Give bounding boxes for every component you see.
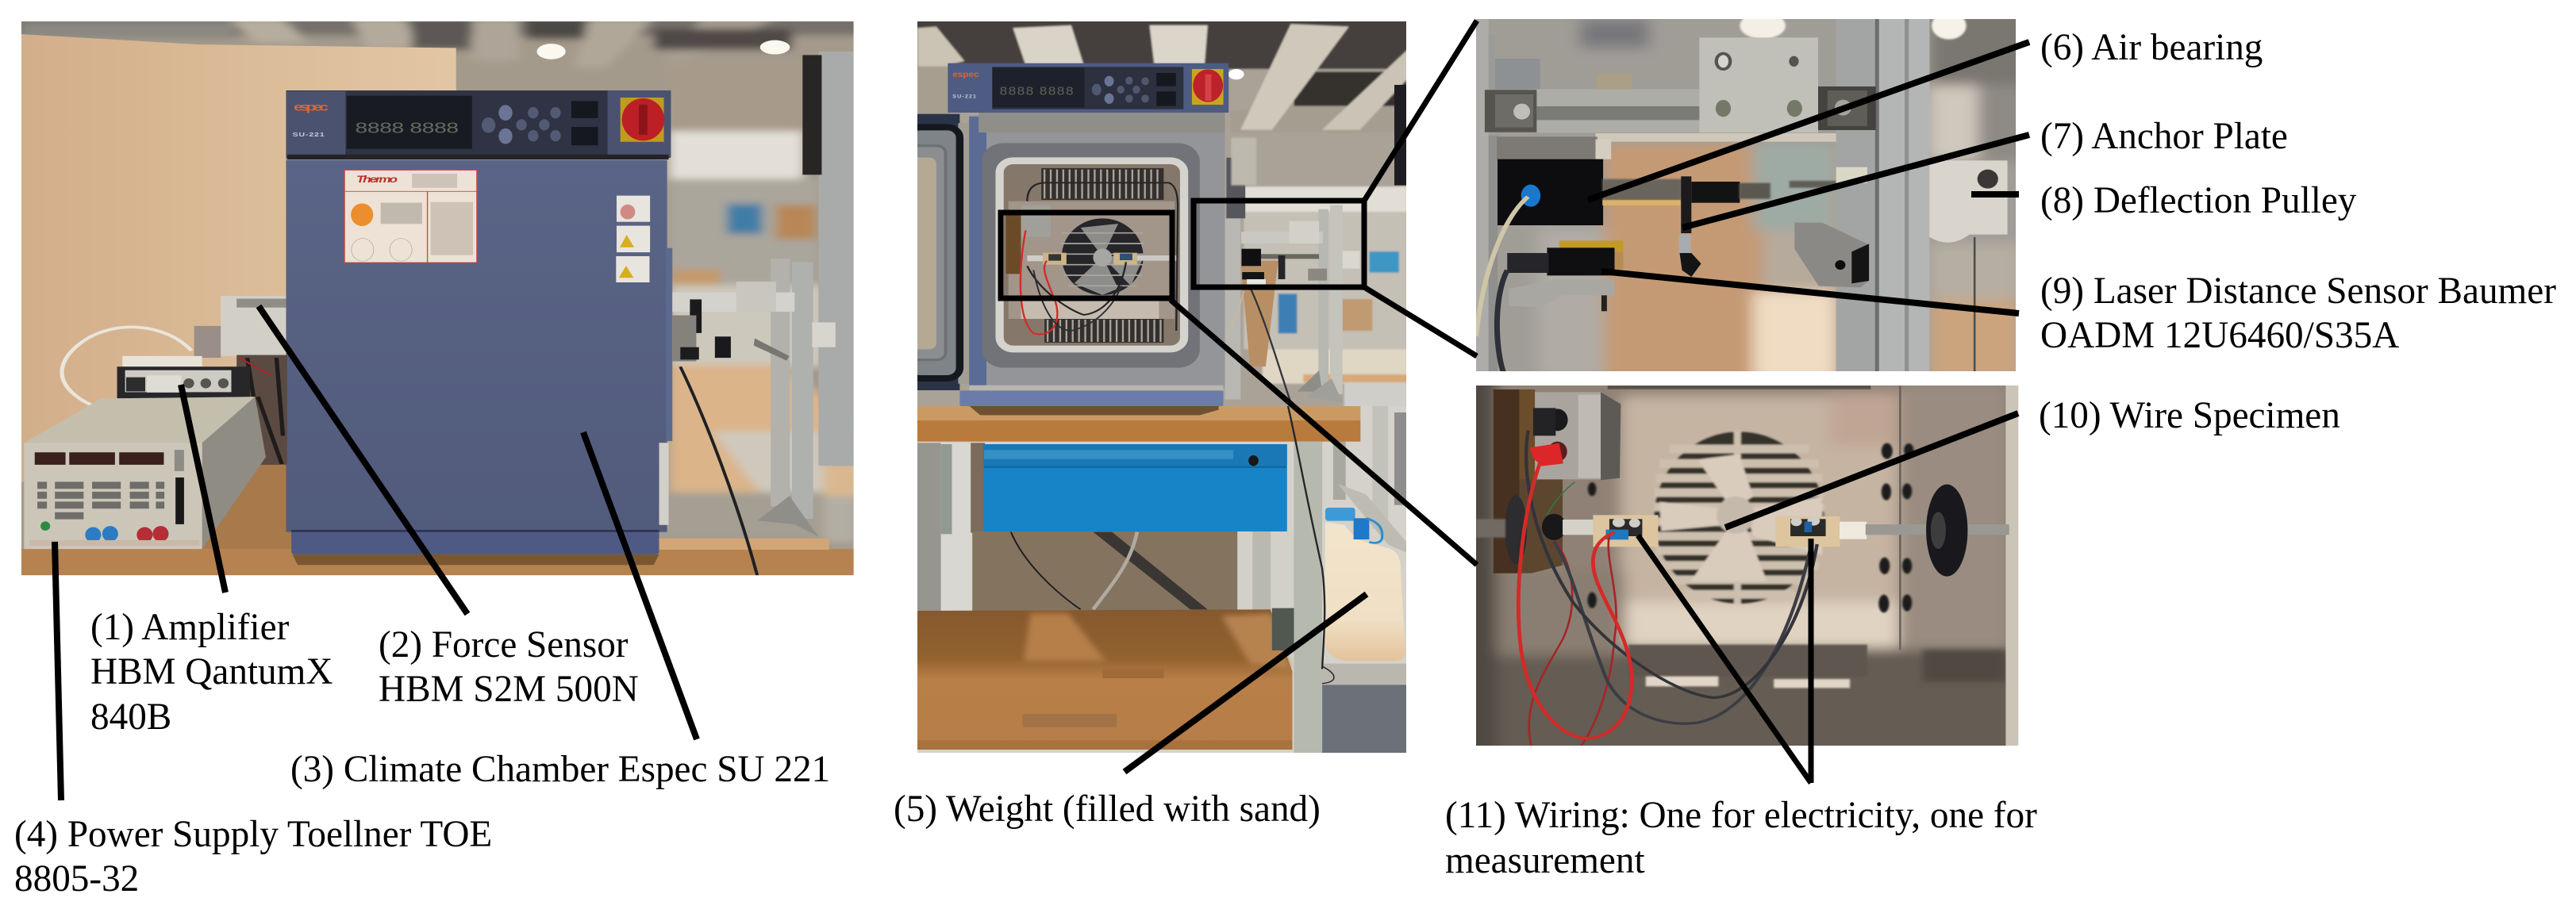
black cable [680,366,757,576]
chamber control panel: SU-221 [952,94,976,99]
power supply [24,397,266,549]
chamber interior with fan [1006,168,1178,343]
table top [917,405,1360,442]
laser distance sensor [1507,240,1623,311]
chamber body [286,160,672,554]
label 9: laser distance sensor: OADM 12U6460/S35A [2040,315,2399,356]
label 11: wiring: measurement [1445,840,1645,881]
zoom frame: wire specimen region [1001,213,1477,565]
open door [917,114,963,390]
air bearing black block [1497,136,1611,225]
chamber control panel [948,63,1228,113]
label 1: amplifier: (1) Amplifier [90,607,289,648]
cardboard backdrop [21,34,456,481]
aluminium frame right [672,259,836,537]
blurred chamber interior [1455,370,2043,766]
chamber control panel [286,90,671,159]
leader: deflection pulley [1971,191,2019,198]
blurred fan [1655,431,1824,604]
chamber body with opening [969,113,1225,388]
chamber control panel: 8888 8888 [356,120,459,136]
warning stickers [616,196,650,282]
label 1: amplifier: HBM QantumX [90,651,333,692]
leader: wire specimen [1725,413,2018,527]
label 11: wiring: (11) Wiring: One for electricity, one for [1445,795,2037,836]
panel: open chamber photo [908,16,1413,753]
leader: climate chamber [583,432,697,739]
label 8: deflection pulley: (8) Deflection Pulley [2040,180,2357,221]
chamber control panel: espec [952,71,978,79]
sticker: Thermo service label [344,170,477,263]
panel: close-up air bearing photo [1455,3,2037,389]
leader: anchor plate [1682,135,2029,228]
deflection pulley [1929,160,2008,371]
amplifier [117,356,250,398]
ceiling lights and pillar [537,40,855,466]
label 2: force sensor: (2) Force Sensor [379,624,629,666]
under-table space [917,443,1297,611]
label 4: power supply: (4) Power Supply Toellner TOE [14,814,492,855]
label 6: air bearing: (6) Air bearing [2040,27,2263,68]
vertical aluminium profiles [1476,19,1929,371]
power connector box [1494,389,1621,574]
zoom frame: air bearing region [1194,21,1477,356]
label 3: climate chamber: (3) Climate Chamber Espec SU 221 [290,749,830,790]
label 7: anchor plate: (7) Anchor Plate [2040,116,2288,157]
lower part: table, drawer, shelf and weight [917,405,1406,753]
leader: power supply [55,542,61,800]
lower wooden shelf [917,609,1293,750]
label 5: weight: (5) Weight (filled with sand) [894,788,1321,830]
air and sensor hoses [1476,197,1528,374]
photo background: ceiling and lab [6,11,871,592]
chamber control panel: SU-221 [292,132,325,138]
force sensor bracket and wiring [194,296,287,465]
sticker: Thermo service label: Thermo [356,175,398,185]
white cable [60,325,194,406]
label 10: wire specimen: (10) Wire Specimen [2039,395,2340,436]
heater fins and light edge [1608,386,2019,747]
specimen fixture [1476,485,2009,577]
table leg [1272,442,1322,753]
rod and anchor plate [1602,167,1867,277]
blue drawer [983,444,1287,531]
leader: air bearing [1588,42,2029,200]
black board and duct [1226,69,1407,218]
chamber control panel: 8888 8888 [1000,85,1074,98]
cardboard behind frame [1240,261,1278,366]
chamber base [959,386,1224,406]
aluminium slotted profile [1794,223,1869,287]
keyhole slots [1587,443,1913,612]
cables outside chamber [1251,290,1291,401]
horizontal arm with bracket [1485,37,1876,142]
label 9: laser distance sensor: (9) Laser Distance Sensor Baumer [2040,270,2556,312]
work table [21,464,855,576]
label 1: amplifier: 840B [90,696,171,738]
label 4: power supply: 8805-32 [14,858,139,900]
aluminium frame [1225,205,1360,402]
black cable [1288,405,1325,669]
canister weight filled with sand [1325,508,1405,661]
ceiling lights [1740,12,1967,40]
leader: force sensor [259,306,467,614]
leader: wiring pair [1638,535,1811,783]
cables [1518,431,1817,747]
label 2: force sensor: HBM S2M 500N [379,669,639,710]
panel: close-up wire specimen photo [1455,370,2043,766]
leader: weight [1125,594,1367,772]
ceiling and lab background [911,16,1413,409]
upper part: chamber and lab [908,16,1413,409]
chamber control panel: espec [294,101,329,113]
panel: front photo of climate chamber [6,11,871,592]
leader: laser distance sensor [1601,271,2019,313]
leader: amplifier [181,385,225,593]
blurred background [1455,3,2037,389]
